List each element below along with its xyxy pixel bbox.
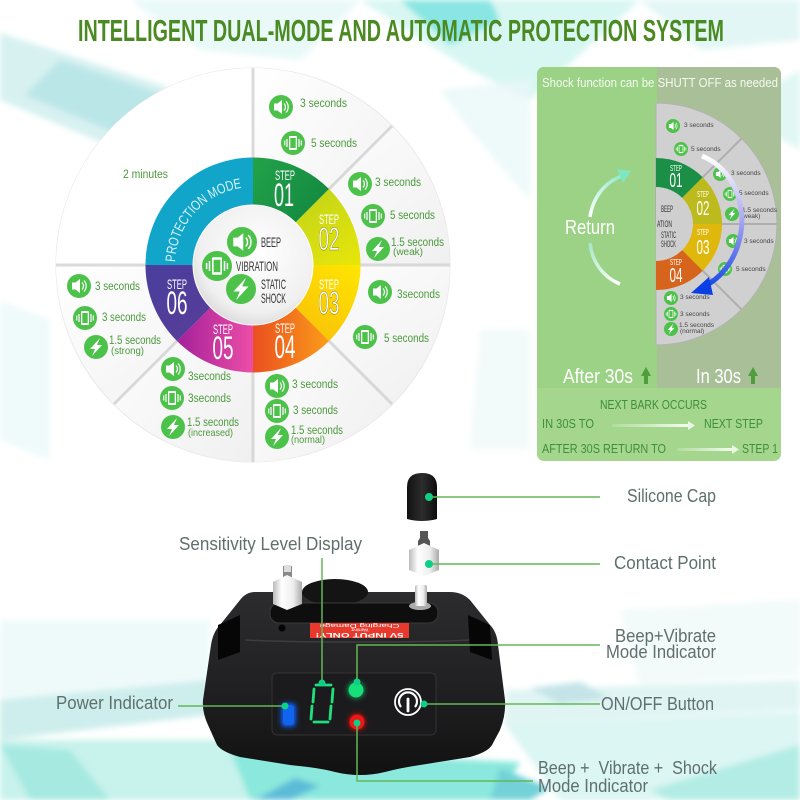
step 04 details: 3 seconds [292,379,338,391]
step labels: STEP [275,320,295,336]
center hub legend: SHOCK [261,290,286,306]
sensitivity digit [311,685,333,722]
half step wheel: STEP [697,228,709,237]
step labels [166,167,340,366]
sector: protection mode [56,68,253,265]
warning label [310,622,409,638]
half step wheel: weak) [742,213,760,220]
step 02 details: (weak) [393,246,423,258]
half step wheel: 5 seconds [736,266,766,273]
callout: contact point [425,553,716,573]
step 05 details: 3seconds [188,371,231,383]
callout: on off button [420,694,714,714]
wheel base [56,68,450,462]
center hub legend [193,205,313,325]
step 06 details [67,274,161,359]
in 30s rule: NEXT STEP [704,416,763,431]
panel: shock shut off [537,67,781,461]
warning label: Warning: [351,628,368,632]
half step wheel: ATION [657,219,672,229]
silicone cap [407,473,437,521]
half step wheel: 3 seconds [680,311,710,318]
half step wheel: STEP [670,164,682,173]
callout: beep vibrate shock mode indicator: Beep + Vibrate + Shock [538,758,718,778]
half step wheel: 04 [670,265,682,287]
shoulder ridge [245,640,470,642]
half step wheel: 3 seconds [731,170,761,177]
return arrow: Return [565,217,615,239]
step 06 details: 3 seconds [102,312,146,324]
step 05 details [160,357,239,439]
loose contact point [409,531,439,576]
side slots [218,615,492,660]
step labels: 01 [274,177,294,213]
half step wheel: 1.5 seconds [679,322,715,329]
half step wheel: BEEP [661,204,673,214]
half step wheel: 01 [670,170,682,192]
step 03 details: 3seconds [397,289,440,301]
half step wheel: (normal) [680,328,704,335]
half step wheel: 02 [696,198,710,220]
step 05 details: 3seconds [188,393,231,405]
step 04 details: (normal) [291,434,325,446]
step 01 details: 3 seconds [300,98,347,110]
gray overlay area [657,67,781,388]
step 06 details: (strong) [111,345,144,357]
half step wheel: 3 seconds [684,122,714,129]
callout: on off button: ON/OFF Button [601,694,714,714]
step labels: 05 [212,330,234,366]
half step wheel: STEP [670,258,682,267]
callouts [56,486,718,796]
vent hole [278,624,286,632]
left green area [537,67,657,388]
step labels: 02 [318,221,340,257]
after 30s rule: STEP 1 [742,441,778,456]
warning label: 5V INPUT ONLY! [316,631,404,637]
threaded stud [409,585,431,610]
callout: power indicator: Power Indicator [56,693,173,713]
callout: beep vibrate shock mode indicator [354,720,718,796]
beep vibrate LED [347,681,365,699]
step 04 details: 3 seconds [293,405,338,417]
half step wheel: STEP [697,190,709,199]
half step wheel: 03 [696,237,710,259]
step 04 details: 1.5 seconds [291,425,343,437]
colored ring [146,158,360,372]
half step wheel: SHOCK [661,239,676,249]
step 05 details: (increased) [188,427,233,439]
after 30s rule: AFTER 30S RETURN TO [542,441,666,456]
callout: sensitivity level display [179,534,362,686]
step 01 details: 5 seconds [311,138,357,150]
power button [395,689,421,715]
center hub legend: STATIC [261,276,286,292]
callout: beep vibrate mode indicator: Beep+Vibrate [615,626,716,646]
ring heading: protection mode: PROTECTION MODE [166,178,242,262]
blue step arrow [691,156,742,295]
half step wheel: 1.5 seconds [742,207,778,214]
callout: silicone cap [425,486,716,506]
mounting bracket [270,603,438,623]
step 03 details: 5 seconds [384,333,429,345]
step 02 details: 3 seconds [375,177,421,189]
step labels: STEP [275,167,295,183]
half step wheel: 5 seconds [739,190,769,197]
callout: beep vibrate mode indicator [354,626,716,686]
step 03 details [353,280,440,349]
step 06 details: 3 seconds [95,281,140,293]
panel background [537,67,781,461]
step labels: 03 [318,285,340,321]
step 02 details: 1.5 seconds [391,237,444,249]
callout: contact point: Contact Point [614,553,716,573]
sector shading [56,68,450,462]
half step wheel: 3 seconds [680,294,710,301]
collar body [203,592,505,775]
step labels: 04 [274,329,296,365]
after 30s rule [542,441,778,456]
center hub legend: BEEP [261,234,281,250]
half step wheel: 3 seconds [744,238,774,245]
device [203,473,505,775]
charging port cover [302,579,368,605]
step 02 details [348,172,444,261]
callout: beep vibrate shock mode indicator: Mode Indicator [538,776,648,796]
step 05 details: 1.5 seconds [187,417,239,429]
left contact point [273,565,302,610]
power indicator LED [281,703,296,727]
shock LED [348,713,366,731]
callout: beep vibrate mode indicator: Mode Indicator [606,642,716,662]
warning label: Charging Damage [319,622,400,628]
callout: silicone cap: Silicone Cap [627,486,716,506]
step wheel [56,68,450,462]
step labels: STEP [213,321,233,337]
step labels: STEP [319,276,339,292]
control panel [272,673,436,735]
step 06 details: 1.5 seconds [109,335,161,347]
in 30s rule: IN 30S TO [542,416,594,431]
return arrow [565,169,631,284]
callout: sensitivity level display: Sensitivity Level Display [179,534,362,554]
in 30s label: In 30s [696,366,741,388]
step 02 details: 5 seconds [390,210,435,222]
step 04 details [265,374,343,449]
after 30s label: After 30s [563,366,633,388]
center hub legend: VIBRATION [236,258,278,274]
step labels: STEP [319,211,339,227]
step labels: 06 [166,285,188,321]
half step wheel: 5 seconds [691,146,721,153]
step labels: STEP [167,276,187,292]
in 30s rule [542,416,763,431]
callout: power indicator [56,693,288,713]
half step wheel: STATIC [661,230,676,240]
next bark occurs: NEXT BARK OCCURS [600,397,707,412]
sector dividers [56,68,450,462]
half step wheel [656,103,778,345]
protection duration: 2 minutes [123,169,168,181]
step 01 details [269,95,357,155]
